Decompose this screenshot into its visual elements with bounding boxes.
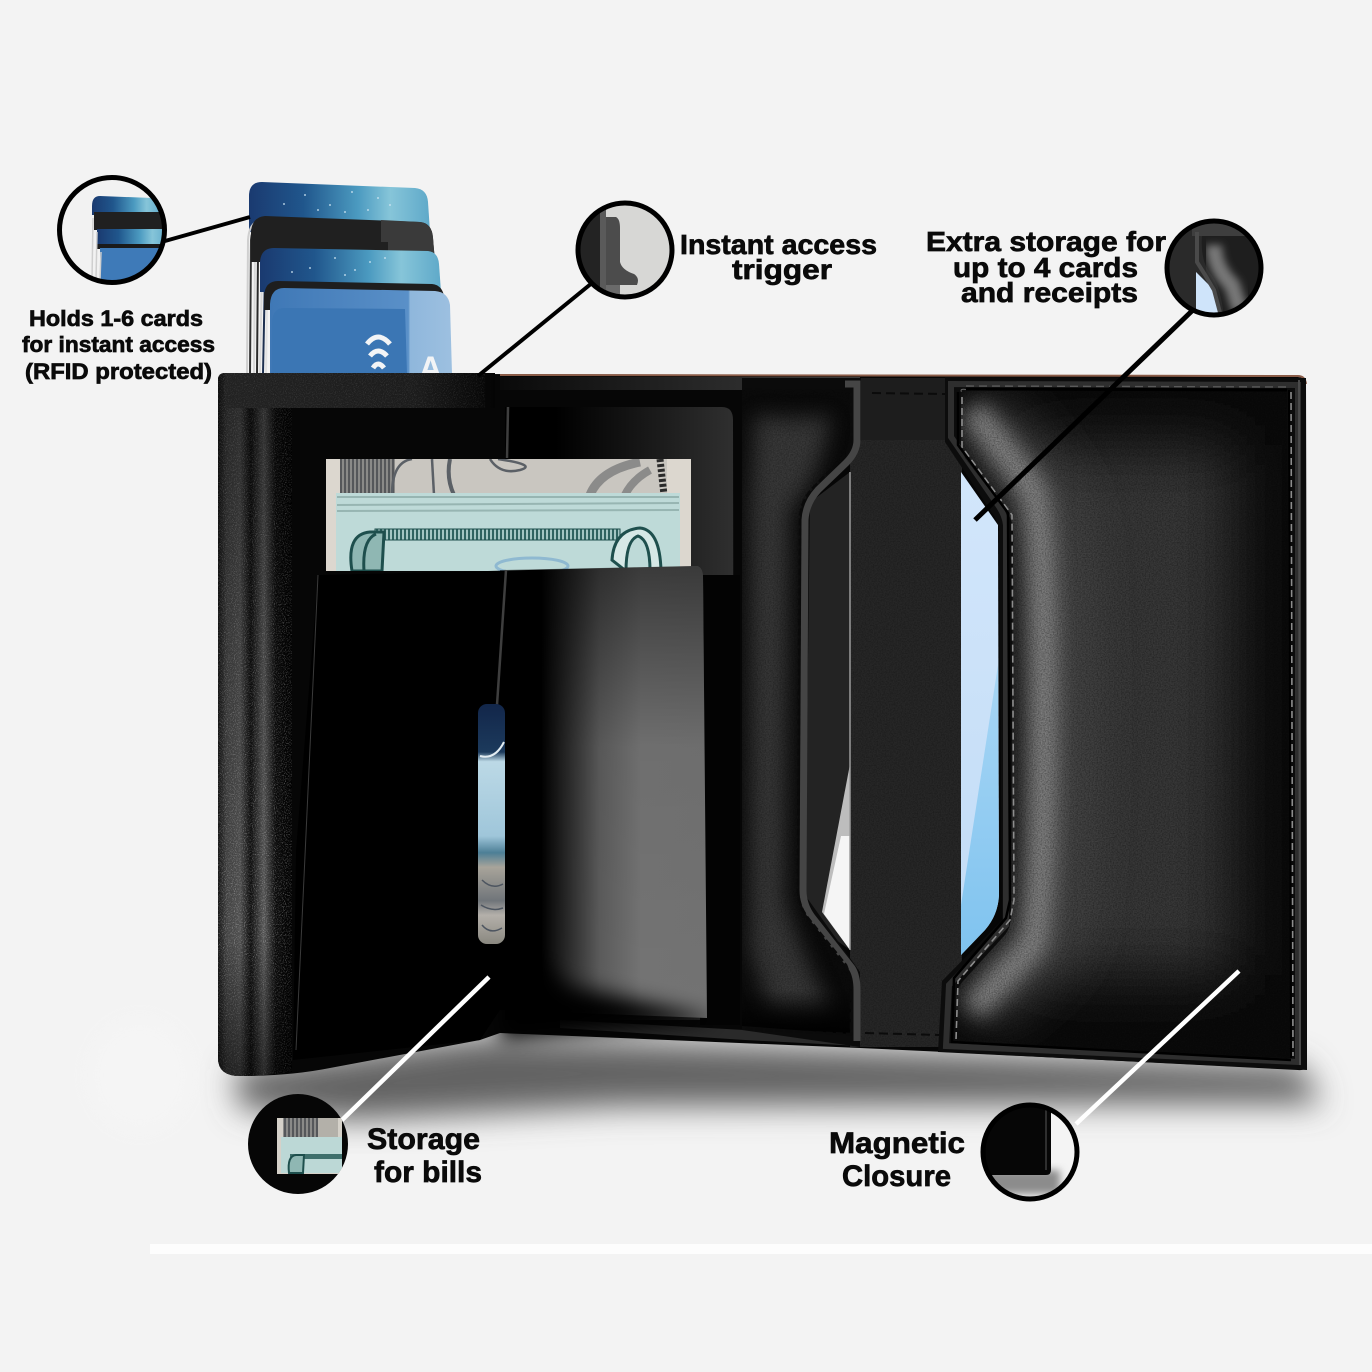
white reflection bright xyxy=(824,836,850,950)
right window blue card xyxy=(961,472,999,955)
label: bills: Storage xyxy=(367,1123,480,1156)
right dark seam xyxy=(1289,390,1291,1058)
top bar xyxy=(225,373,495,408)
flap grain xyxy=(956,392,1255,1034)
connector: trigger xyxy=(478,283,592,376)
connector: magnetic closure xyxy=(1076,971,1239,1124)
stars middle card xyxy=(291,257,386,276)
top seam xyxy=(966,389,1287,390)
flap border xyxy=(946,384,1298,1062)
card: starry middle xyxy=(260,248,441,292)
shadow xyxy=(975,1170,1060,1194)
flap base xyxy=(962,448,986,484)
bill front xyxy=(281,1137,342,1173)
label: extra storage: Extra storage for xyxy=(926,226,1166,257)
detail circle: extra storage xyxy=(1165,219,1265,320)
left stitching xyxy=(956,397,1014,1040)
flap highlight xyxy=(1214,245,1240,310)
plate left hairline xyxy=(296,575,318,1050)
front plate top shade xyxy=(500,566,707,1018)
silhouette xyxy=(218,373,1307,1076)
stars top card xyxy=(283,191,391,213)
flap stitching xyxy=(745,390,851,1034)
engraving portrait xyxy=(318,1118,338,1138)
window edge xyxy=(849,472,851,950)
bills xyxy=(326,459,691,574)
engraving dark xyxy=(340,459,395,495)
portrait xyxy=(392,459,664,495)
pocket back panel xyxy=(505,407,734,1020)
lower-left plate shadow xyxy=(500,900,720,1040)
label: magnetic xyxy=(829,1127,965,1193)
edge highlight xyxy=(972,410,1044,1010)
center stitching xyxy=(865,393,945,1035)
connector: bills xyxy=(340,977,489,1122)
bill slit xyxy=(478,704,505,944)
label: cards: Holds 1-6 cards xyxy=(29,306,203,331)
wallet shadow xyxy=(90,1020,1322,1130)
bill: front xyxy=(336,493,680,571)
label: cards: for instant access xyxy=(22,332,215,357)
wallet corner xyxy=(975,1100,1051,1175)
bill swirl xyxy=(289,1155,304,1173)
card: blue xyxy=(270,288,452,374)
front plate xyxy=(293,566,707,1060)
white strip xyxy=(150,1244,1372,1254)
label: extra storage: and receipts xyxy=(961,277,1138,308)
icon: contactless xyxy=(367,337,390,368)
dark seam xyxy=(952,392,1291,1060)
bill: frame xyxy=(351,528,661,574)
label: bills xyxy=(367,1123,482,1189)
label: extra storage xyxy=(926,226,1166,308)
connector: extra storage xyxy=(975,308,1195,520)
body glow xyxy=(1030,445,1235,975)
flap stitch highlight xyxy=(961,389,966,392)
bill: back xyxy=(326,459,691,571)
card stack xyxy=(247,182,452,386)
card: starry top xyxy=(249,182,430,232)
white reflection xyxy=(822,764,850,950)
bill: fold bands xyxy=(337,497,679,511)
spine grain xyxy=(218,373,292,1076)
black shade lower back panel xyxy=(700,575,740,1025)
black card xyxy=(94,212,168,230)
card edges xyxy=(246,222,268,373)
right stitching xyxy=(1291,392,1293,1056)
engraving xyxy=(283,1118,318,1138)
trigger shape xyxy=(606,217,638,285)
detail circle: cards xyxy=(57,178,168,282)
left leather flap xyxy=(742,378,861,1047)
starry card 2 xyxy=(97,229,162,244)
black card 2 xyxy=(97,244,160,249)
label: bills: for bills xyxy=(374,1156,482,1189)
connector: cards xyxy=(165,217,250,241)
flap xyxy=(1202,236,1265,320)
bottom band xyxy=(560,1020,860,1046)
spine xyxy=(218,373,292,1076)
center top fill xyxy=(860,378,946,440)
detail circle: magnetic closure xyxy=(975,1100,1082,1204)
detail circle: bills xyxy=(248,1094,348,1194)
copper top edge xyxy=(500,375,1306,384)
label: extra storage: up to 4 cards xyxy=(953,252,1138,283)
card: black thin xyxy=(264,281,444,310)
detail circle: trigger xyxy=(576,200,676,300)
top stitching xyxy=(966,386,1287,387)
vertical hairline xyxy=(497,407,508,705)
blue card xyxy=(100,248,159,280)
center leather panel xyxy=(850,378,962,1047)
wide highlight xyxy=(975,415,1060,1005)
label: magnetic: Magnetic xyxy=(829,1127,965,1160)
edges xyxy=(92,218,101,280)
bill: engraving xyxy=(395,459,667,493)
right leather flap xyxy=(938,377,1307,1070)
center grain xyxy=(850,378,962,1047)
card brand letter: A xyxy=(419,350,442,386)
flap edge xyxy=(1197,232,1222,320)
label: cards: (RFID protected) xyxy=(25,359,212,384)
right rim xyxy=(1299,380,1300,1065)
label: trigger: Instant access xyxy=(680,229,877,260)
wallet body xyxy=(218,373,1307,1076)
label: magnetic: Closure xyxy=(842,1160,951,1193)
top band xyxy=(500,377,860,390)
left window xyxy=(800,472,850,950)
flap highlights xyxy=(750,415,830,1010)
label: cards xyxy=(22,306,215,384)
starry card xyxy=(92,196,162,215)
bill back xyxy=(277,1118,342,1174)
label: trigger xyxy=(680,229,877,285)
blue window xyxy=(1196,272,1222,320)
wallet rim xyxy=(1045,1100,1047,1170)
bill frame xyxy=(290,1154,342,1159)
label: trigger: trigger xyxy=(732,254,832,285)
seam band xyxy=(1192,222,1264,236)
flap outline xyxy=(803,384,857,1041)
card: black lighter part xyxy=(381,220,434,254)
card: black xyxy=(251,216,435,262)
top bar grain xyxy=(225,373,485,408)
card: inner blue xyxy=(286,308,407,373)
